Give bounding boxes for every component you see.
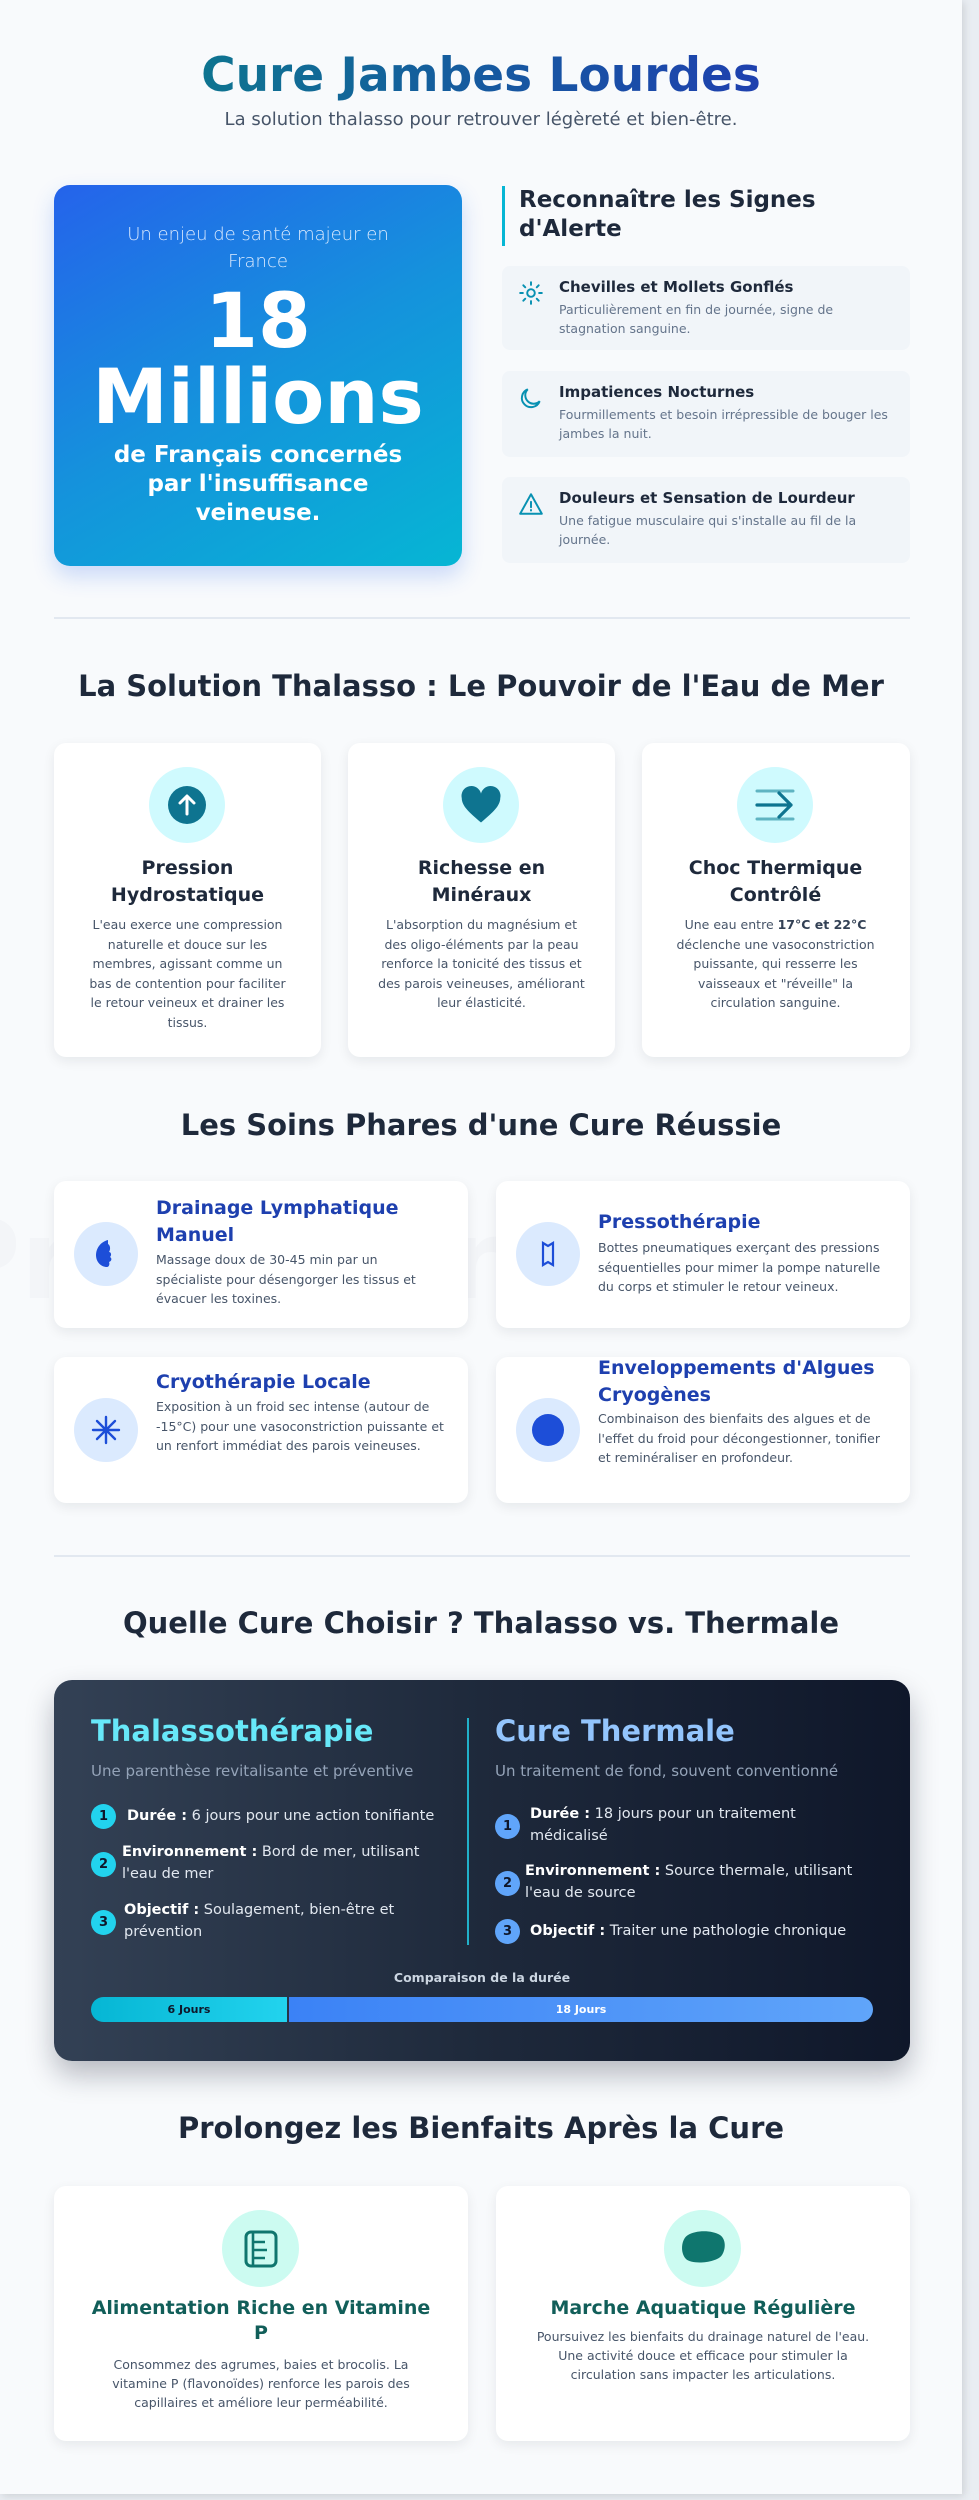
column: thermale: Environnement : Source thermale, utilisant l'eau de source [525, 1863, 852, 1901]
tip: alimentation: Alimentation Riche en Vitamine P [92, 2297, 430, 2344]
column: thalasso: Thalassothérapie [91, 1714, 373, 1748]
section title: prolongez: Prolongez les Bienfaits Après la Cure [178, 2111, 784, 2145]
card: mineraux [348, 743, 615, 1057]
card: pression: L'eau exerce une compression naturelle et douce sur les membres, agissant comme un bas de contention pour faciliter le retour veineux et drainer les tissus. [89, 917, 286, 1030]
alert: douleurs [502, 477, 910, 563]
soin: cryo: Cryothérapie Locale [156, 1371, 371, 1393]
column: thermale: Objectif : Traiter une pathologie chronique [530, 1923, 846, 1939]
column: thermale: 2 [503, 1876, 512, 1891]
card: choc thermique [642, 743, 910, 1057]
icon: water blob [664, 2210, 741, 2287]
hero unit: Millions [92, 352, 424, 441]
duration bar chart: Comparaison de la durée [394, 1970, 570, 1985]
column: thalasso: Environnement : Bord de mer, utilisant l'eau de mer [122, 1844, 419, 1882]
hero stat card [54, 185, 462, 566]
soin: presso: Pressothérapie [598, 1211, 761, 1233]
icon: heart [443, 767, 519, 843]
column: thalasso: Durée : 6 jours pour une action tonifiante [127, 1808, 434, 1824]
soin: drainage: Drainage Lymphatique Manuel [156, 1197, 398, 1246]
column: thermale: 1 [503, 1819, 512, 1834]
icon: sun [519, 281, 543, 305]
subtitle: La solution thalasso pour retrouver légèreté et bien-être. [225, 109, 737, 130]
section title: soins: Les Soins Phares d'une Cure Réussie [181, 1108, 781, 1142]
alert: impatiences: Fourmillements et besoin irrépressible de bouger les jambes la nuit. [559, 407, 888, 441]
icon: dot [516, 1398, 580, 1462]
soin: algues [496, 1357, 910, 1503]
column: thalasso [91, 1714, 434, 1940]
icon: arrow up [149, 767, 225, 843]
alert: chevilles: Particulièrement en fin de journée, signe de stagnation sanguine. [559, 302, 833, 336]
duration bar chart: 18 Jours [556, 2003, 606, 2016]
icon: drop [74, 1222, 138, 1286]
card: choc thermique: Une eau entre 17°C et 22°C déclenche une vasoconstriction puissante, qui resserre les vaisseaux et "réveille" la circulation sanguine. [676, 917, 875, 1010]
soin: algues: Combinaison des bienfaits des algues et de l'effet du froid pour décongestionner, tonifier et reminéraliser en profondeur. [598, 1411, 880, 1465]
card: pression [54, 743, 321, 1057]
duration bar chart [91, 1970, 873, 2022]
tip: marche [496, 2186, 910, 2441]
column: thalasso: Objectif : Soulagement, bien-être et prévention [124, 1902, 394, 1940]
column: thalasso: 3 [99, 1915, 108, 1930]
card: mineraux: L'absorption du magnésium et des oligo-éléments par la peau renforce la tonicité des tissus et des parois veineuses, améliorant leur élasticité. [378, 917, 585, 1010]
vertical divider [467, 1718, 469, 1945]
tip: alimentation: Consommez des agrumes, baies et brocolis. La vitamine P (flavonoïdes) renforce les parois des capillaires et améliore leur perméabilité. [112, 2357, 410, 2410]
hero caption: de Français concernés par l'insuffisance veineuse. [114, 442, 402, 526]
column: thalasso: 2 [99, 1857, 108, 1872]
soin: presso [496, 1181, 910, 1328]
alert: chevilles [502, 266, 910, 350]
card: mineraux: Richesse en Minéraux [418, 857, 545, 906]
soin: drainage [54, 1181, 468, 1328]
icon: warning [519, 493, 543, 515]
section title: comparaison: Quelle Cure Choisir ? Thalasso vs. Thermale [123, 1606, 839, 1640]
soin: presso: Bottes pneumatiques exerçant des pressions séquentielles pour mimer la pompe naturelle du corps et stimuler le retour veineux. [598, 1240, 880, 1294]
alert: chevilles: Chevilles et Mollets Gonflés [559, 278, 793, 296]
icon: notebook [222, 2210, 299, 2287]
hero number: 18 [205, 276, 311, 365]
card: pression: Pression Hydrostatique [111, 857, 264, 906]
section title: solution: La Solution Thalasso : Le Pouvoir de l'Eau de Mer [78, 669, 884, 703]
column: thalasso: 1 [99, 1809, 108, 1824]
alert heading: Reconnaître les Signes d'Alerte [519, 187, 816, 242]
icon: arrow right [737, 767, 813, 843]
tip: alimentation [54, 2186, 468, 2441]
icon: boot [516, 1222, 580, 1286]
column: thermale: Durée : 18 jours pour un traitement médicalisé [530, 1806, 796, 1844]
soin: drainage: Massage doux de 30-45 min par un spécialiste pour désengorger les tissus et évacuer les toxines. [156, 1252, 416, 1306]
column: thalasso: Une parenthèse revitalisante et préventive [91, 1762, 413, 1780]
icon: moon [520, 388, 540, 408]
tip: marche: Poursuivez les bienfaits du drainage naturel de l'eau. Une activité douce et efficace pour stimuler la circulation sans impacter les articulations. [537, 2329, 869, 2382]
alert heading [502, 186, 910, 246]
hero kicker: Un enjeu de santé majeur en France [127, 224, 389, 272]
column: thermale [495, 1714, 852, 1944]
alert: impatiences: Impatiences Nocturnes [559, 383, 754, 401]
soin: algues: Enveloppements d'Algues Cryogènes [598, 1357, 875, 1406]
column: thermale: 3 [503, 1924, 512, 1939]
tip: marche: Marche Aquatique Régulière [550, 2297, 856, 2319]
column: thermale: Un traitement de fond, souvent conventionné [495, 1762, 838, 1780]
alert: impatiences [502, 371, 910, 457]
soin: cryo [54, 1357, 468, 1503]
icon: snowflake [74, 1398, 138, 1462]
alert: douleurs: Une fatigue musculaire qui s'installe au fil de la journée. [559, 513, 856, 547]
alert: douleurs: Douleurs et Sensation de Lourdeur [559, 489, 855, 507]
card: choc thermique: Choc Thermique Contrôlé [689, 857, 862, 906]
soin: cryo: Exposition à un froid sec intense (autour de -15°C) pour une vasoconstriction puissante et un renfort immédiat des parois veineuses. [156, 1399, 444, 1453]
title: Cure Jambes Lourdes [201, 48, 761, 103]
column: thermale: Cure Thermale [495, 1714, 735, 1748]
duration bar chart: 6 Jours [168, 2003, 210, 2016]
comparison panel [54, 1680, 910, 2061]
